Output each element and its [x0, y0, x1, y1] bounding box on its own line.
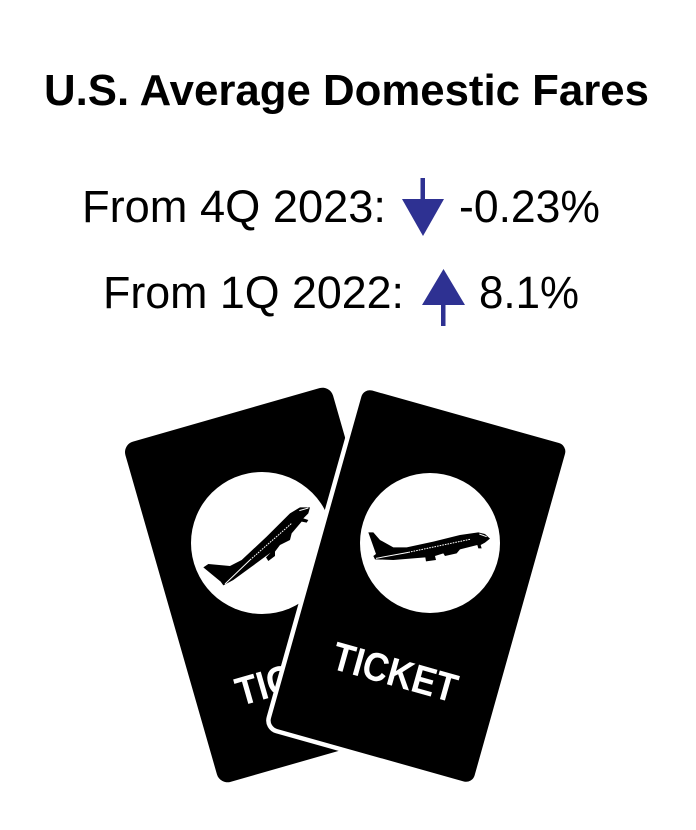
text: change from 4Q 2023: [82, 181, 600, 232]
text: change from 4Q 2023: From 4Q 2023:: [82, 181, 386, 232]
text: change from 1Q 2022: [103, 267, 579, 318]
icon: up arrow: [422, 269, 465, 326]
left ticket label: TICKET: [231, 637, 366, 715]
title: U.S. Average Domestic Fares: [44, 66, 649, 115]
icon: left ticket circle: [191, 472, 333, 614]
left ticket: [122, 385, 428, 785]
text: change from 4Q 2023: -0.23%: [459, 181, 600, 232]
right ticket label: TICKET: [327, 634, 462, 711]
icon: down arrow: [402, 178, 444, 236]
icon: plane climbing: [203, 507, 310, 585]
text: change from 1Q 2022: From 1Q 2022:: [103, 267, 404, 318]
right ticket: [266, 385, 570, 787]
icon: plane level: [368, 532, 490, 561]
text: change from 1Q 2022: 8.1%: [479, 267, 579, 318]
icon: right ticket circle: [360, 473, 500, 613]
